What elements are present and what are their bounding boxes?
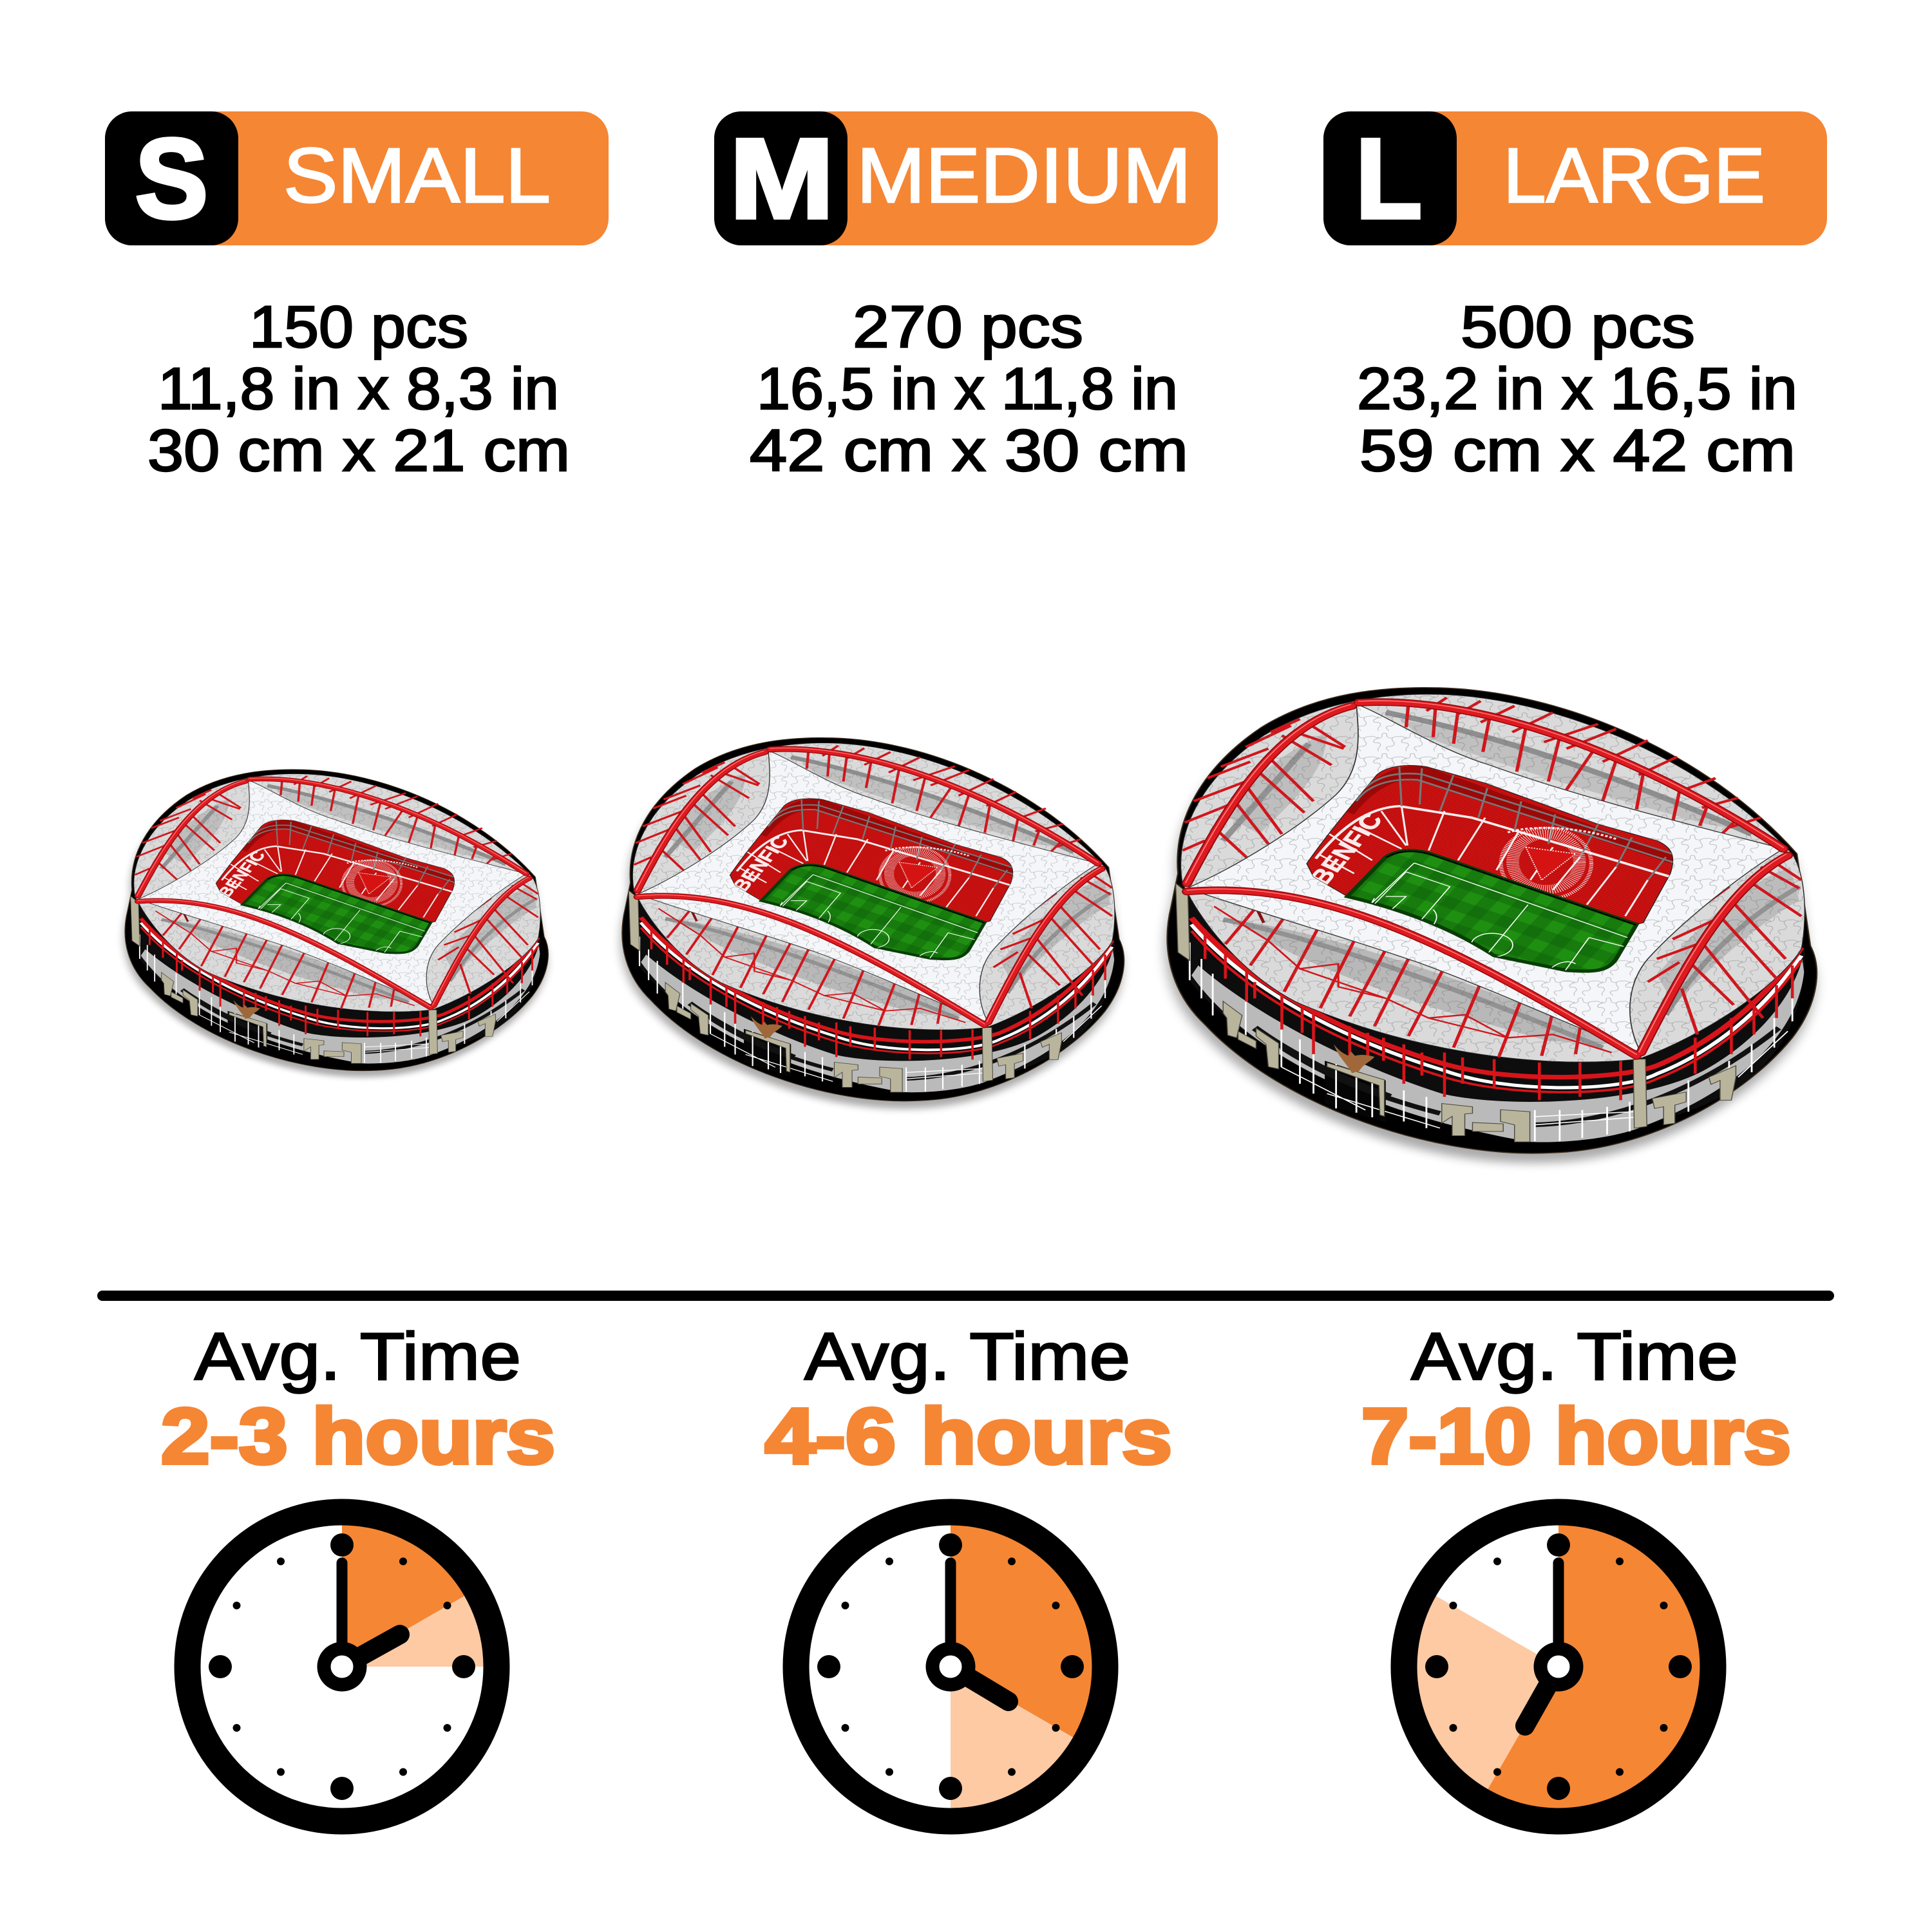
red main arches (1186, 701, 1788, 1056)
specs: medium: 270 pcs (853, 294, 1083, 360)
stadium facade (1178, 884, 1805, 1142)
specs: large (1357, 294, 1797, 484)
stadium puzzle: large (1166, 688, 1817, 1163)
badge: medium (714, 111, 1218, 245)
time label: large: Avg. Time (1411, 1320, 1738, 1394)
white tensile membrane (1187, 705, 1783, 1052)
time label: small (161, 1320, 555, 1480)
badge: small (105, 111, 609, 245)
time label: medium (765, 1320, 1172, 1480)
specs: medium (750, 294, 1188, 484)
under-arch dark hangers (1253, 900, 1533, 1005)
red roof hangers (1182, 697, 1801, 1057)
concrete pylons and entrance frames (1176, 884, 1736, 1142)
specs: large: 23,2 in x 16,5 in (1357, 356, 1797, 422)
specs: large: 59 cm x 42 cm (1359, 418, 1795, 484)
time label: small: Avg. Time (194, 1320, 521, 1394)
wooden base layer (1167, 688, 1817, 1153)
specs: medium: 16,5 in x 11,8 in (757, 356, 1178, 422)
stadium puzzle: medium (621, 738, 1124, 1109)
specs: small: 11,8 in x 8,3 in (158, 356, 559, 422)
specs: large: 500 pcs (1461, 294, 1695, 360)
time label: small: 2-3 hours (161, 1392, 555, 1480)
specs: small (147, 294, 570, 484)
football pitch (1347, 851, 1636, 972)
time label: medium: 4-6 hours (765, 1392, 1172, 1480)
stadium puzzle: small (124, 770, 548, 1077)
time label: large (1361, 1320, 1791, 1480)
specs: small: 150 pcs (249, 294, 468, 360)
badge: large (1323, 111, 1827, 245)
roof disc (1180, 694, 1804, 1062)
eagle statue (1334, 1045, 1374, 1074)
specs: small: 30 cm x 21 cm (147, 418, 570, 484)
clock: 4-6 hours (796, 1512, 1105, 1821)
specs: medium: 42 cm x 30 cm (750, 418, 1188, 484)
stadium shadow (1166, 697, 1815, 1163)
jigsaw cut lines (1180, 694, 1804, 1062)
badge: medium: M (730, 116, 834, 242)
clock: 7-10 hours (1404, 1512, 1713, 1821)
roof shading bands (1223, 712, 1799, 1048)
badge: large: LARGE (1503, 131, 1765, 219)
badge: small: SMALL (283, 131, 551, 219)
stand lettering: BENFIC (1305, 810, 1388, 889)
badge: small: S (135, 116, 208, 242)
time label: medium: Avg. Time (804, 1320, 1130, 1394)
time label: large: 7-10 hours (1361, 1392, 1791, 1480)
seating bowl (1305, 766, 1677, 924)
divider (97, 1291, 1834, 1301)
badge: medium: MEDIUM (857, 131, 1191, 219)
club crest (1501, 828, 1591, 899)
dark entrance recess (1325, 1061, 1386, 1122)
badge: large: L (1356, 116, 1422, 242)
clock: 2-3 hours (187, 1512, 497, 1821)
